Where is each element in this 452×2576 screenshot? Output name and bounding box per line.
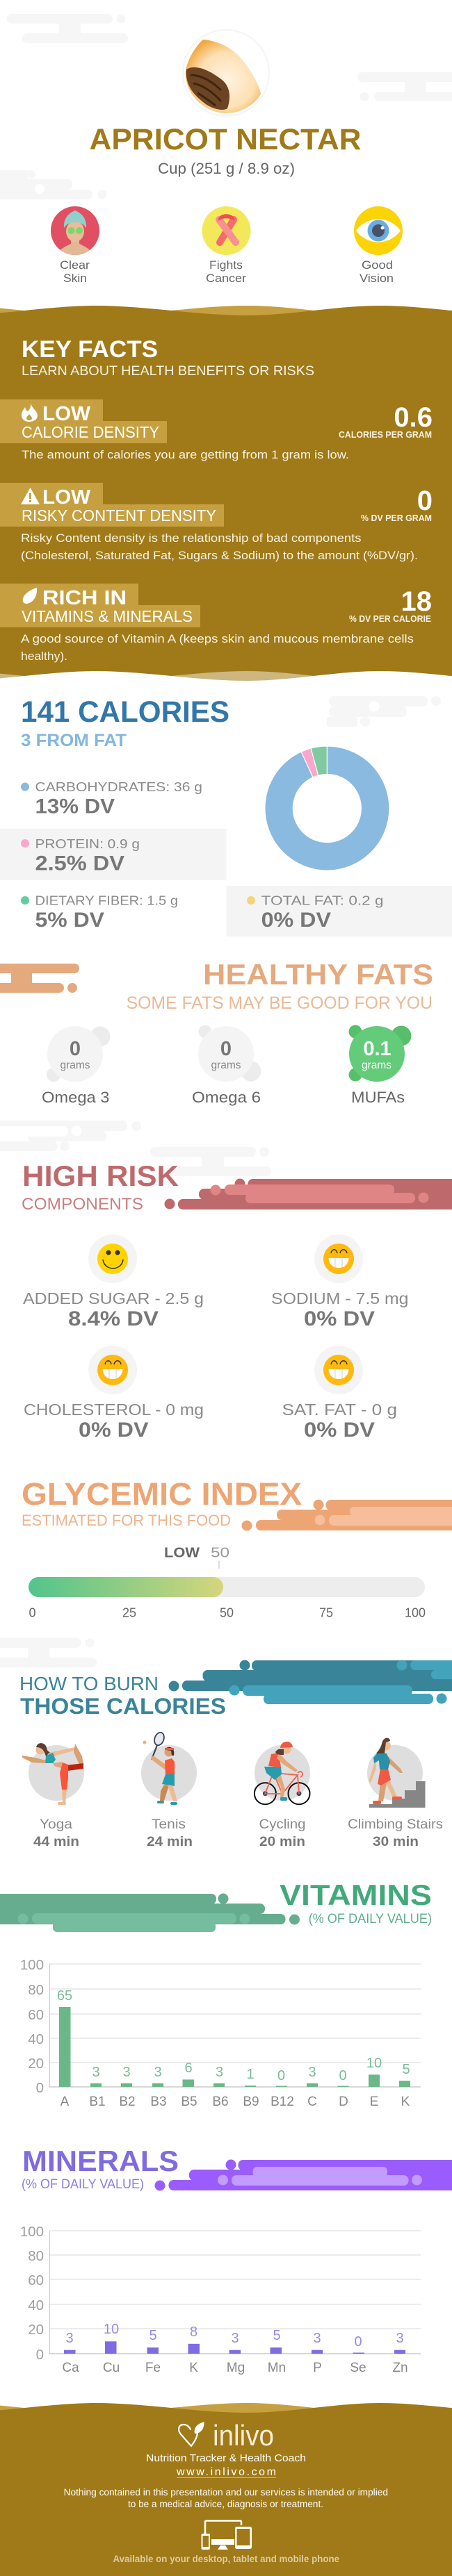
- panel: glycemic index: [22, 1476, 452, 1620]
- bar chart: minerals: Fe: [145, 2361, 161, 2375]
- donut chart: macronutrients: [265, 746, 389, 870]
- benefit: clear skin: [51, 206, 99, 285]
- heading: minerals: [22, 2145, 179, 2192]
- heading: vitamins: VITAMINS: [280, 1879, 432, 1911]
- exercise: yoga: Yoga: [40, 1817, 72, 1832]
- panel: key facts: [0, 306, 452, 691]
- stat: omega 6: 0: [220, 1038, 232, 1060]
- food image: apricot half: [183, 30, 269, 116]
- gauge scale: 100: [405, 1606, 426, 1620]
- heading: glycemic index: ESTIMATED FOR THIS FOOD: [22, 1512, 231, 1529]
- fact: low risky content density: LOW: [42, 486, 91, 509]
- bar chart: vitamins: C: [307, 2095, 317, 2109]
- bar chart: vitamins: K: [401, 2095, 410, 2109]
- bar chart: minerals: 80: [28, 2248, 44, 2264]
- stat: omega 3: [42, 1026, 110, 1106]
- bar chart: minerals: 40: [28, 2297, 44, 2313]
- stat: omega 3: 0: [70, 1038, 81, 1060]
- text: availability: Available on your desktop, tablet and mobile phone: [113, 2553, 339, 2564]
- legend: protein: 2.5% DV: [35, 852, 124, 875]
- benefit: clear skin: Clear: [60, 258, 90, 272]
- heading: minerals: MINERALS: [22, 2145, 179, 2177]
- item: saturated fat: 0% DV: [304, 1419, 375, 1442]
- heading: how to burn: HOW TO BURN: [19, 1673, 159, 1694]
- bar chart: vitamins: A: [60, 2095, 70, 2109]
- benefit: fights cancer: Cancer: [206, 272, 246, 285]
- decorative clouds: high risk: [0, 1121, 271, 1176]
- item: saturated fat: SAT. FAT - 0 g: [282, 1401, 397, 1419]
- heading: vitamins: (% OF DAILY VALUE): [309, 1912, 432, 1926]
- text: disclaimer: Nothing contained in this presentation and our services is intended or implied: [64, 2487, 388, 2497]
- bar chart: minerals: 10: [104, 2322, 119, 2337]
- bar chart: vitamins: 3: [308, 2065, 316, 2080]
- bar chart: vitamins: 80: [28, 1982, 44, 1998]
- item: cholesterol: CHOLESTEROL - 0 mg: [24, 1401, 204, 1419]
- bar chart: vitamins: 0: [277, 2068, 285, 2083]
- bar chart: vitamins: 3: [216, 2065, 223, 2080]
- gauge scale: [29, 1606, 426, 1620]
- exercise: tennis: 24 min: [147, 1835, 193, 1849]
- benefit: fights cancer: Fights: [209, 258, 243, 272]
- item: saturated fat: [282, 1346, 397, 1442]
- bar chart: vitamins: B2: [119, 2095, 136, 2109]
- heading: how to burn: [19, 1673, 226, 1719]
- exercise: cycling: [255, 1742, 310, 1849]
- logo: heart and leaf: [179, 2419, 274, 2452]
- bar chart: vitamins: 0: [36, 2080, 44, 2096]
- exercise: cycling: Cycling: [259, 1817, 306, 1832]
- heading: calories: 3 FROM FAT: [21, 731, 127, 750]
- bar chart: vitamins: [20, 1957, 421, 2109]
- fact: rich in vitamins and minerals: RICH IN: [42, 587, 127, 609]
- panel: footer: [0, 2403, 452, 2576]
- fact: low risky content density: 0: [417, 486, 433, 516]
- bar chart: vitamins: B12: [271, 2095, 294, 2109]
- heading: healthy fats: SOME FATS MAY BE GOOD FOR YOU: [127, 993, 433, 1013]
- bar chart: vitamins: 1: [246, 2067, 255, 2082]
- bar chart: minerals: Mn: [268, 2361, 286, 2375]
- bar chart: minerals: 3: [231, 2331, 239, 2346]
- stat: mufas: [349, 1025, 412, 1106]
- fact: rich in vitamins and minerals: % DV PER CALORIE: [349, 613, 431, 624]
- bar chart: minerals: K: [189, 2361, 198, 2375]
- legend: protein: [0, 829, 227, 880]
- fact: rich in vitamins and minerals: 18: [401, 586, 432, 617]
- bar chart: minerals: Ca: [62, 2361, 79, 2375]
- bar chart: minerals: P: [313, 2361, 322, 2375]
- bar chart: minerals: 100: [20, 2224, 44, 2240]
- serving size: Cup (251 g / 8.9 oz): [158, 160, 295, 177]
- item: cholesterol: [24, 1346, 204, 1442]
- fact: low calorie density: LOW: [42, 403, 91, 425]
- fact: low calorie density: [0, 399, 433, 461]
- fact: low calorie density: CALORIES PER GRAM: [339, 429, 432, 440]
- text: disclaimer: [64, 2487, 388, 2509]
- item: sodium: SODIUM - 7.5 mg: [271, 1289, 409, 1307]
- bar chart: minerals: 3: [396, 2331, 404, 2346]
- item: sodium: 0% DV: [304, 1307, 375, 1330]
- item: cholesterol: 0% DV: [79, 1419, 149, 1442]
- bar chart: minerals: 0: [36, 2347, 44, 2363]
- icon: devices: [202, 2520, 252, 2550]
- logo: heart and leaf: inlivo: [213, 2419, 274, 2452]
- exercise: climbing stairs: [348, 1738, 443, 1849]
- exercise: tennis: [141, 1731, 197, 1849]
- bar chart: minerals: 3: [65, 2331, 74, 2346]
- bar chart: minerals: 3: [313, 2331, 321, 2346]
- stat: omega 6: Omega 6: [192, 1089, 261, 1106]
- fact: rich in vitamins and minerals: [0, 584, 432, 663]
- fact: low calorie density: 0.6: [394, 402, 433, 433]
- bar chart: vitamins: B3: [150, 2095, 167, 2109]
- bar chart: minerals: 8: [190, 2325, 197, 2340]
- decorative cloud: calories: [327, 696, 441, 727]
- exercise: cycling: 20 min: [259, 1835, 305, 1849]
- gauge bar: [29, 1577, 425, 1597]
- legend: total fat: [227, 886, 452, 936]
- text: disclaimer: to be a medical advice, diagnosis or treatment.: [128, 2499, 323, 2509]
- exercise: climbing stairs: Climbing Stairs: [348, 1817, 443, 1832]
- stat: omega 6: grams: [211, 1059, 241, 1071]
- gauge value: LOW: [164, 1546, 200, 1561]
- heading: minerals: (% OF DAILY VALUE): [22, 2177, 144, 2192]
- stat: mufas: 0.1: [363, 1038, 392, 1060]
- item: added sugar: ADDED SUGAR - 2.5 g: [23, 1289, 204, 1307]
- stat: mufas: grams: [362, 1059, 392, 1071]
- bar chart: vitamins: B5: [181, 2095, 197, 2109]
- gauge value: [164, 1546, 229, 1569]
- bar chart: vitamins: 5: [402, 2062, 410, 2077]
- decorative cloud: burn: [0, 1638, 97, 1667]
- title: APRICOT NECTAR: [89, 123, 362, 156]
- heading: high risk: [22, 1159, 179, 1214]
- panel: vitamins: [0, 1879, 432, 2109]
- benefit: good vision: Good: [362, 258, 393, 272]
- gauge value: 50: [211, 1546, 229, 1561]
- gauge scale: 25: [122, 1606, 136, 1620]
- heading: how to burn: THOSE CALORIES: [20, 1694, 226, 1719]
- stat: omega 3: Omega 3: [42, 1089, 110, 1106]
- bar chart: minerals: Mg: [227, 2361, 245, 2375]
- bar chart: vitamins: 6: [184, 2061, 193, 2076]
- legend: carbohydrates: [21, 779, 202, 818]
- decoration: minerals stripes: [154, 2159, 452, 2191]
- legend: dietary fiber: 5% DV: [35, 909, 104, 932]
- text: tagline: Nutrition Tracker & Health Coach: [146, 2452, 306, 2464]
- gauge scale: 50: [220, 1606, 234, 1620]
- bar chart: vitamins: B1: [89, 2095, 106, 2109]
- stat: omega 3: grams: [60, 1059, 90, 1071]
- heading: vitamins: [280, 1879, 432, 1926]
- legend: total fat: TOTAL FAT: 0.2 g: [261, 893, 384, 908]
- heading: glycemic index: [22, 1476, 302, 1529]
- decoration: healthy fats stripes: [0, 964, 79, 993]
- bar chart: minerals: 5: [273, 2328, 281, 2343]
- gauge scale: 75: [319, 1606, 333, 1620]
- bar chart: vitamins: D: [339, 2095, 348, 2109]
- item: added sugar: [23, 1235, 204, 1330]
- bar chart: vitamins: E: [370, 2095, 378, 2109]
- bar chart: vitamins: B9: [243, 2095, 259, 2109]
- decoration: high risk stripes: [164, 1178, 452, 1209]
- exercise: yoga: [22, 1743, 84, 1849]
- fact: low risky content density: % DV PER GRAM: [361, 513, 432, 523]
- heading: healthy fats: HEALTHY FATS: [203, 958, 433, 991]
- bar chart: minerals: 5: [149, 2328, 157, 2343]
- heading: healthy fats: [127, 958, 433, 1013]
- bar chart: vitamins: 60: [28, 2007, 44, 2023]
- exercise: tennis: Tenis: [152, 1817, 186, 1832]
- fact: low calorie density: The amount of calories you are getting from 1 gram is low.: [22, 449, 349, 461]
- legend: dietary fiber: [21, 893, 178, 932]
- text: website: www.inlivo.com: [176, 2466, 276, 2478]
- stat: mufas: MUFAs: [351, 1089, 405, 1106]
- fact: low calorie density: CALORIE DENSITY: [22, 423, 159, 441]
- heading: high risk: COMPONENTS: [22, 1195, 143, 1214]
- bar chart: vitamins: 20: [28, 2056, 44, 2072]
- bar chart: minerals: Cu: [103, 2361, 120, 2375]
- benefit: good vision: Vision: [360, 272, 394, 285]
- fact: rich in vitamins and minerals: VITAMINS & MINERALS: [22, 607, 193, 625]
- heading: high risk: HIGH RISK: [22, 1159, 179, 1192]
- bar chart: vitamins: 40: [28, 2031, 44, 2047]
- stat: omega 6: [192, 1025, 261, 1106]
- exercise: climbing stairs: 30 min: [373, 1835, 419, 1849]
- panel: high risk: [22, 1159, 452, 1442]
- fact: rich in vitamins and minerals: healthy).: [21, 650, 67, 663]
- panel: minerals: [20, 2145, 452, 2375]
- heading: key facts: KEY FACTS: [22, 336, 158, 363]
- bar chart: minerals: 60: [28, 2272, 44, 2288]
- heading: key facts: LEARN ABOUT HEALTH BENEFITS OR RISKS: [22, 363, 314, 379]
- bar chart: minerals: Se: [350, 2361, 366, 2375]
- bar chart: vitamins: 0: [339, 2068, 347, 2083]
- benefit: good vision: [354, 206, 403, 285]
- heading: glycemic index: GLYCEMIC INDEX: [22, 1476, 302, 1512]
- fact: low risky content density: (Cholesterol, Saturated Fat, Sugars & Sodium) to the amount (%DV/gr).: [21, 550, 418, 562]
- bar chart: vitamins: 100: [20, 1957, 44, 1973]
- fact: low risky content density: [0, 483, 433, 562]
- decoration: glycemic stripes: [242, 1499, 452, 1531]
- item: sodium: [271, 1235, 409, 1330]
- panel: how to burn: [19, 1660, 452, 1849]
- decoration: burn stripes: [168, 1660, 452, 1704]
- legend: total fat: 0% DV: [261, 909, 331, 932]
- legend: dietary fiber: DIETARY FIBER: 1.5 g: [35, 893, 178, 908]
- panel: calories: [0, 695, 452, 936]
- benefit: clear skin: Skin: [63, 272, 87, 285]
- exercise: yoga: 44 min: [33, 1835, 79, 1849]
- heading: calories: 141 CALORIES: [21, 695, 229, 729]
- item: added sugar: 8.4% DV: [68, 1307, 159, 1330]
- bar chart: vitamins: 3: [154, 2065, 162, 2080]
- decorative clouds: header: [0, 14, 452, 199]
- bar chart: vitamins: 10: [366, 2056, 382, 2071]
- bar chart: vitamins: 3: [92, 2065, 100, 2080]
- legend: protein: PROTEIN: 0.9 g: [35, 836, 140, 851]
- legend: carbohydrates: CARBOHYDRATES: 36 g: [35, 779, 202, 794]
- heading: calories: [21, 695, 229, 750]
- legend: carbohydrates: 13% DV: [35, 795, 115, 818]
- bar chart: minerals: [20, 2224, 421, 2375]
- bar chart: minerals: 20: [28, 2322, 44, 2338]
- heading: key facts: [22, 336, 314, 379]
- benefit: fights cancer: [202, 206, 250, 285]
- bar chart: minerals: Zn: [392, 2361, 408, 2375]
- decoration: vitamins stripes: [0, 1894, 300, 1932]
- fact: low risky content density: Risky Content density is the relationship of bad components: [21, 532, 362, 545]
- gauge scale: 0: [29, 1606, 36, 1620]
- bar chart: vitamins: 3: [122, 2065, 131, 2080]
- bar chart: vitamins: 65: [57, 1988, 72, 2004]
- bar chart: vitamins: B6: [212, 2095, 229, 2109]
- fact: low risky content density: RISKY CONTENT DENSITY: [22, 506, 216, 525]
- panel: healthy fats: [0, 958, 433, 1106]
- bar chart: minerals: 0: [354, 2334, 362, 2350]
- fact: rich in vitamins and minerals: A good source of Vitamin A (keeps skin and mucous membrane cells: [21, 633, 414, 645]
